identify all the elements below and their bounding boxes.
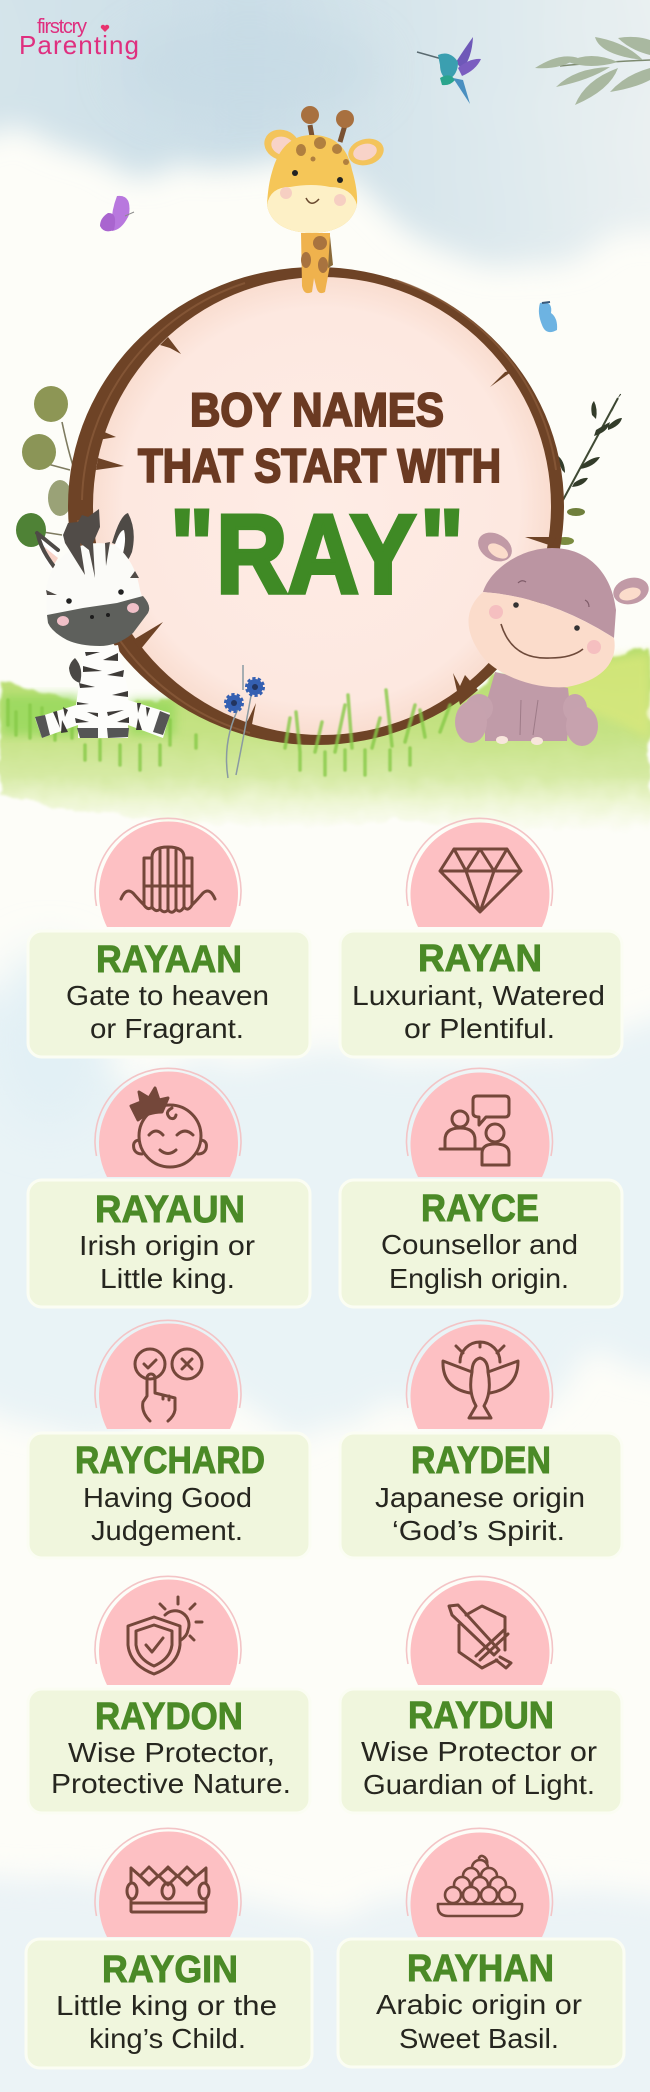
zebra: body and legs xyxy=(35,645,170,738)
name box xyxy=(340,931,622,1057)
icon circle xyxy=(406,818,552,927)
icon: diamond xyxy=(440,849,521,912)
name: RAYCE xyxy=(421,1188,539,1230)
icon circle xyxy=(406,1068,552,1177)
meaning line 2: or Fragrant. xyxy=(90,1013,244,1044)
icon: purple butterfly xyxy=(100,196,134,231)
logo: firstcry: firstcry xyxy=(37,16,87,38)
zebra: ears xyxy=(37,533,58,570)
medallion: pink center xyxy=(89,274,553,738)
hippo: muzzle xyxy=(469,592,615,687)
icon: dove xyxy=(443,1342,518,1418)
watercolor sky xyxy=(0,0,650,270)
card row 1 right: RAYAN xyxy=(340,818,622,1057)
icon circle xyxy=(406,1576,552,1685)
icon: left eucalyptus branch xyxy=(16,386,78,547)
watercolor lower wash xyxy=(0,950,650,2092)
name: RAYDUN xyxy=(408,1695,554,1737)
icon: crown xyxy=(127,1867,209,1912)
meaning: Arabic origin or xyxy=(376,1989,582,2020)
name box xyxy=(340,1180,622,1307)
icon circle xyxy=(95,1320,241,1429)
zebra xyxy=(35,509,170,738)
title: line 1: BOY NAMES xyxy=(190,383,444,436)
medallion frame xyxy=(68,267,564,745)
grass blades over medallion xyxy=(8,690,450,775)
meaning: Counsellor and xyxy=(381,1229,578,1260)
medallion: wood grain xyxy=(78,280,556,733)
meaning: Gate to heaven xyxy=(66,980,269,1011)
name box xyxy=(28,1433,310,1558)
card row 1 left: RAYAAN xyxy=(28,818,310,1057)
card row 4 left: RAYDON xyxy=(28,1576,310,1813)
name: RAYAUN xyxy=(95,1189,245,1231)
name box xyxy=(28,931,310,1057)
icon: gate xyxy=(121,847,215,912)
name box xyxy=(338,1939,624,2067)
title: RAY: RAY xyxy=(216,492,416,617)
name: RAYGIN xyxy=(102,1949,238,1991)
name box xyxy=(26,1939,312,2068)
zebra: muzzle xyxy=(47,596,149,646)
name box xyxy=(28,1180,310,1307)
icon: baby with crown xyxy=(131,1088,206,1167)
icon: hummingbird xyxy=(417,37,481,104)
title xyxy=(138,383,501,617)
icon: blue butterfly xyxy=(539,302,557,332)
icon: sword and shield xyxy=(449,1605,511,1668)
icon: top right leaves xyxy=(535,37,650,105)
hippo: ears xyxy=(473,527,517,567)
meaning line 2: English origin. xyxy=(389,1263,569,1294)
icon: blue cornflowers xyxy=(226,665,263,778)
zebra: mane and stripes xyxy=(46,509,139,595)
card row 2 left: RAYAUN xyxy=(28,1068,310,1307)
meaning: Japanese origin xyxy=(375,1482,585,1513)
logo xyxy=(19,16,139,60)
title: closing quote: " xyxy=(420,489,464,601)
icon circle xyxy=(95,1576,241,1685)
meaning line 2: Sweet Basil. xyxy=(399,2023,559,2054)
title: line 2: THAT START WITH xyxy=(138,439,501,492)
card row 3 left: RAYCHARD xyxy=(28,1320,310,1558)
name: RAYDEN xyxy=(411,1440,551,1482)
zebra: head xyxy=(46,543,143,615)
meaning: Wise Protector, xyxy=(68,1737,275,1768)
hippo: body xyxy=(485,672,570,741)
icon circle xyxy=(406,1320,552,1429)
icon circle xyxy=(95,818,241,927)
giraffe: neck and legs xyxy=(301,233,330,293)
title: opening quote: " xyxy=(170,489,214,601)
logo: parenting: Parenting xyxy=(19,30,139,60)
logo: heart xyxy=(101,25,109,32)
giraffe: ears xyxy=(260,125,304,165)
icon: shield and sun xyxy=(128,1597,202,1674)
meaning line 2: Protective Nature. xyxy=(51,1768,291,1799)
card row 2 right: RAYCE xyxy=(340,1068,622,1307)
zebra: tail xyxy=(69,658,81,683)
name box xyxy=(340,1433,622,1558)
meaning line 2: ‘God’s Spirit. xyxy=(392,1515,565,1546)
name: RAYAN xyxy=(418,938,542,980)
name: RAYAAN xyxy=(96,939,242,981)
icon: right dark sprig xyxy=(556,394,622,545)
icon: counsellor xyxy=(440,1096,509,1165)
meaning line 2: Little king. xyxy=(100,1263,235,1294)
card row 4 right: RAYDUN xyxy=(340,1576,622,1813)
icon: sweets plate xyxy=(438,1856,522,1916)
icon circle xyxy=(95,1828,241,1937)
name: RAYHAN xyxy=(407,1948,554,1990)
name: RAYCHARD xyxy=(75,1440,265,1482)
meaning line 2: or Plentiful. xyxy=(404,1013,555,1044)
giraffe: head xyxy=(267,135,357,233)
card row 5 left: RAYGIN xyxy=(26,1828,312,2068)
meaning line 2: king’s Child. xyxy=(89,2023,246,2054)
hippo xyxy=(455,527,650,746)
name box xyxy=(340,1689,622,1813)
icon circle xyxy=(95,1068,241,1177)
grass meadow xyxy=(0,650,650,835)
giraffe xyxy=(260,106,387,293)
medallion: thorns xyxy=(96,337,556,735)
meaning line 2: Guardian of Light. xyxy=(363,1769,595,1800)
icon: choice hand xyxy=(135,1349,202,1421)
icon circle xyxy=(406,1828,552,1937)
card row 3 right: RAYDEN xyxy=(340,1320,622,1558)
hippo: head top xyxy=(483,548,616,638)
meaning: Luxuriant, Watered xyxy=(352,980,605,1011)
meaning: Little king or the xyxy=(56,1990,277,2021)
meaning: Irish origin or xyxy=(79,1230,255,1261)
name box xyxy=(28,1689,310,1813)
meaning: Having Good xyxy=(83,1482,252,1513)
medallion: wooden rim xyxy=(68,267,564,745)
card row 5 right: RAYHAN xyxy=(338,1828,624,2067)
meaning line 2: Judgement. xyxy=(91,1515,243,1546)
meaning: Wise Protector or xyxy=(361,1736,597,1767)
giraffe: horns xyxy=(310,125,345,142)
name: RAYDON xyxy=(95,1696,243,1738)
